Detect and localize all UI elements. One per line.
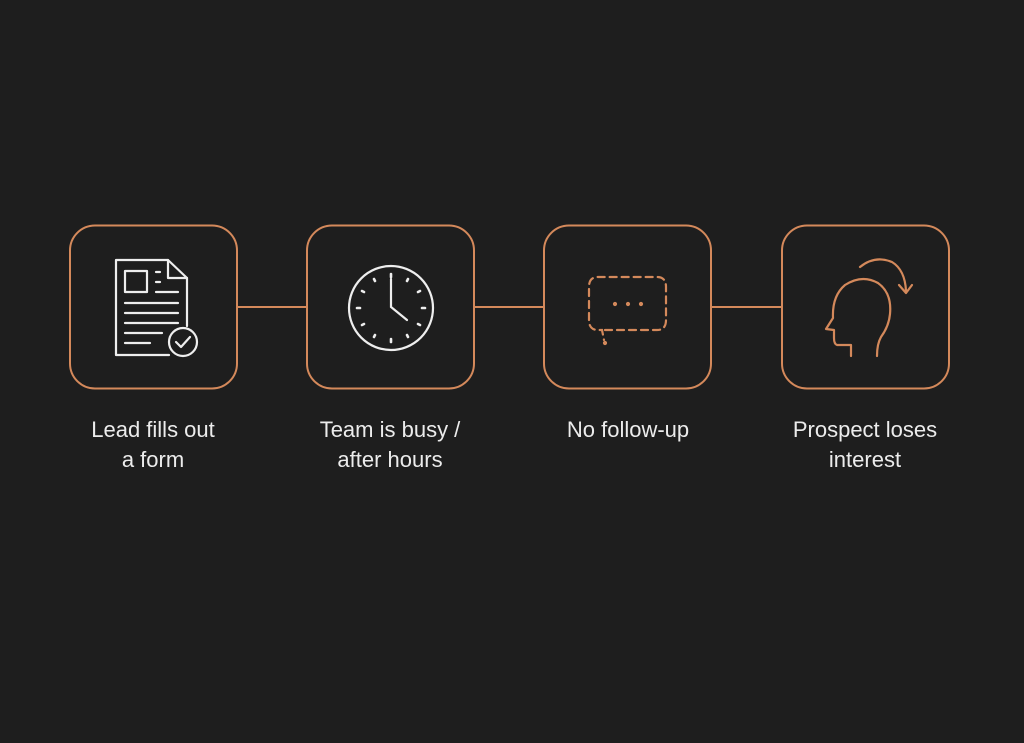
label: team is busy [320,417,460,472]
label: prospect loses interest [793,417,937,472]
label: team is busy: after hours [337,447,443,472]
panel: lead fills out a form [70,226,237,388]
panel: team busy [307,226,474,388]
label: lead fills out a form: Lead fills out [91,417,215,442]
label: lead fills out a form: a form [122,447,184,472]
icon: form document with check [116,260,197,356]
label: lead fills out a form [91,417,215,472]
label: no follow-up: No follow-up [567,417,689,442]
icon: clock [349,266,433,350]
icon: head with arrow [826,259,912,356]
label: prospect loses interest: Prospect loses [793,417,937,442]
panel: prospect loses interest [782,226,949,388]
connectors [237,306,782,308]
panel: no follow-up [544,226,711,388]
label: prospect loses interest: interest [829,447,901,472]
icon: dashed chat bubble [589,277,666,344]
label: team is busy: Team is busy / [320,417,460,442]
